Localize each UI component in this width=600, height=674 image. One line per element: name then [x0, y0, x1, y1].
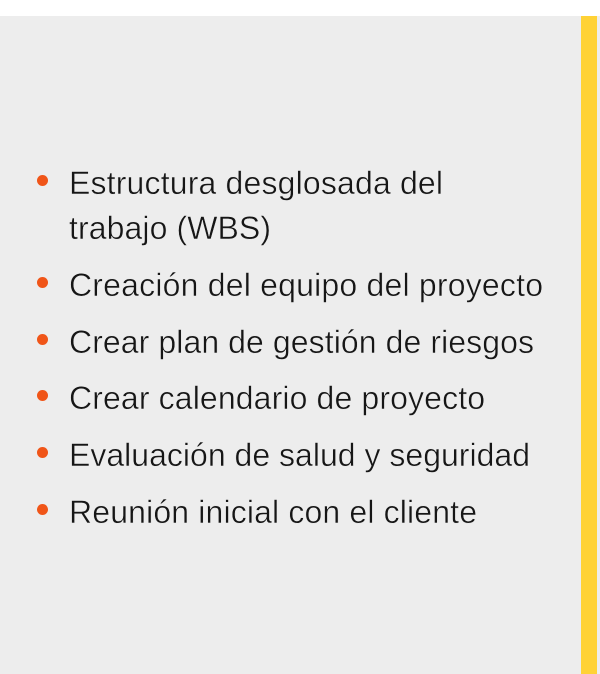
item: Estructura desglosada del trabajo (WBS): Estructura desglosada del [69, 165, 443, 201]
yellow side bar [581, 16, 597, 674]
item: Estructura desglosada del trabajo (WBS) [37, 165, 443, 246]
item: Crear plan de gestión de riesgos: Crear plan de gestión de riesgos [69, 324, 534, 360]
item: Reunión inicial con el cliente: Reunión inicial con el cliente [69, 494, 477, 530]
item: Creación del equipo del proyecto: Creación del equipo del proyecto [69, 267, 543, 303]
item: Evaluación de salud y seguridad: Evaluación de salud y seguridad [69, 437, 530, 473]
item: Crear calendario de proyecto: Crear calendario de proyecto [69, 380, 485, 416]
bullet list [37, 165, 543, 530]
item: Estructura desglosada del trabajo (WBS): trabajo (WBS) [69, 210, 271, 246]
